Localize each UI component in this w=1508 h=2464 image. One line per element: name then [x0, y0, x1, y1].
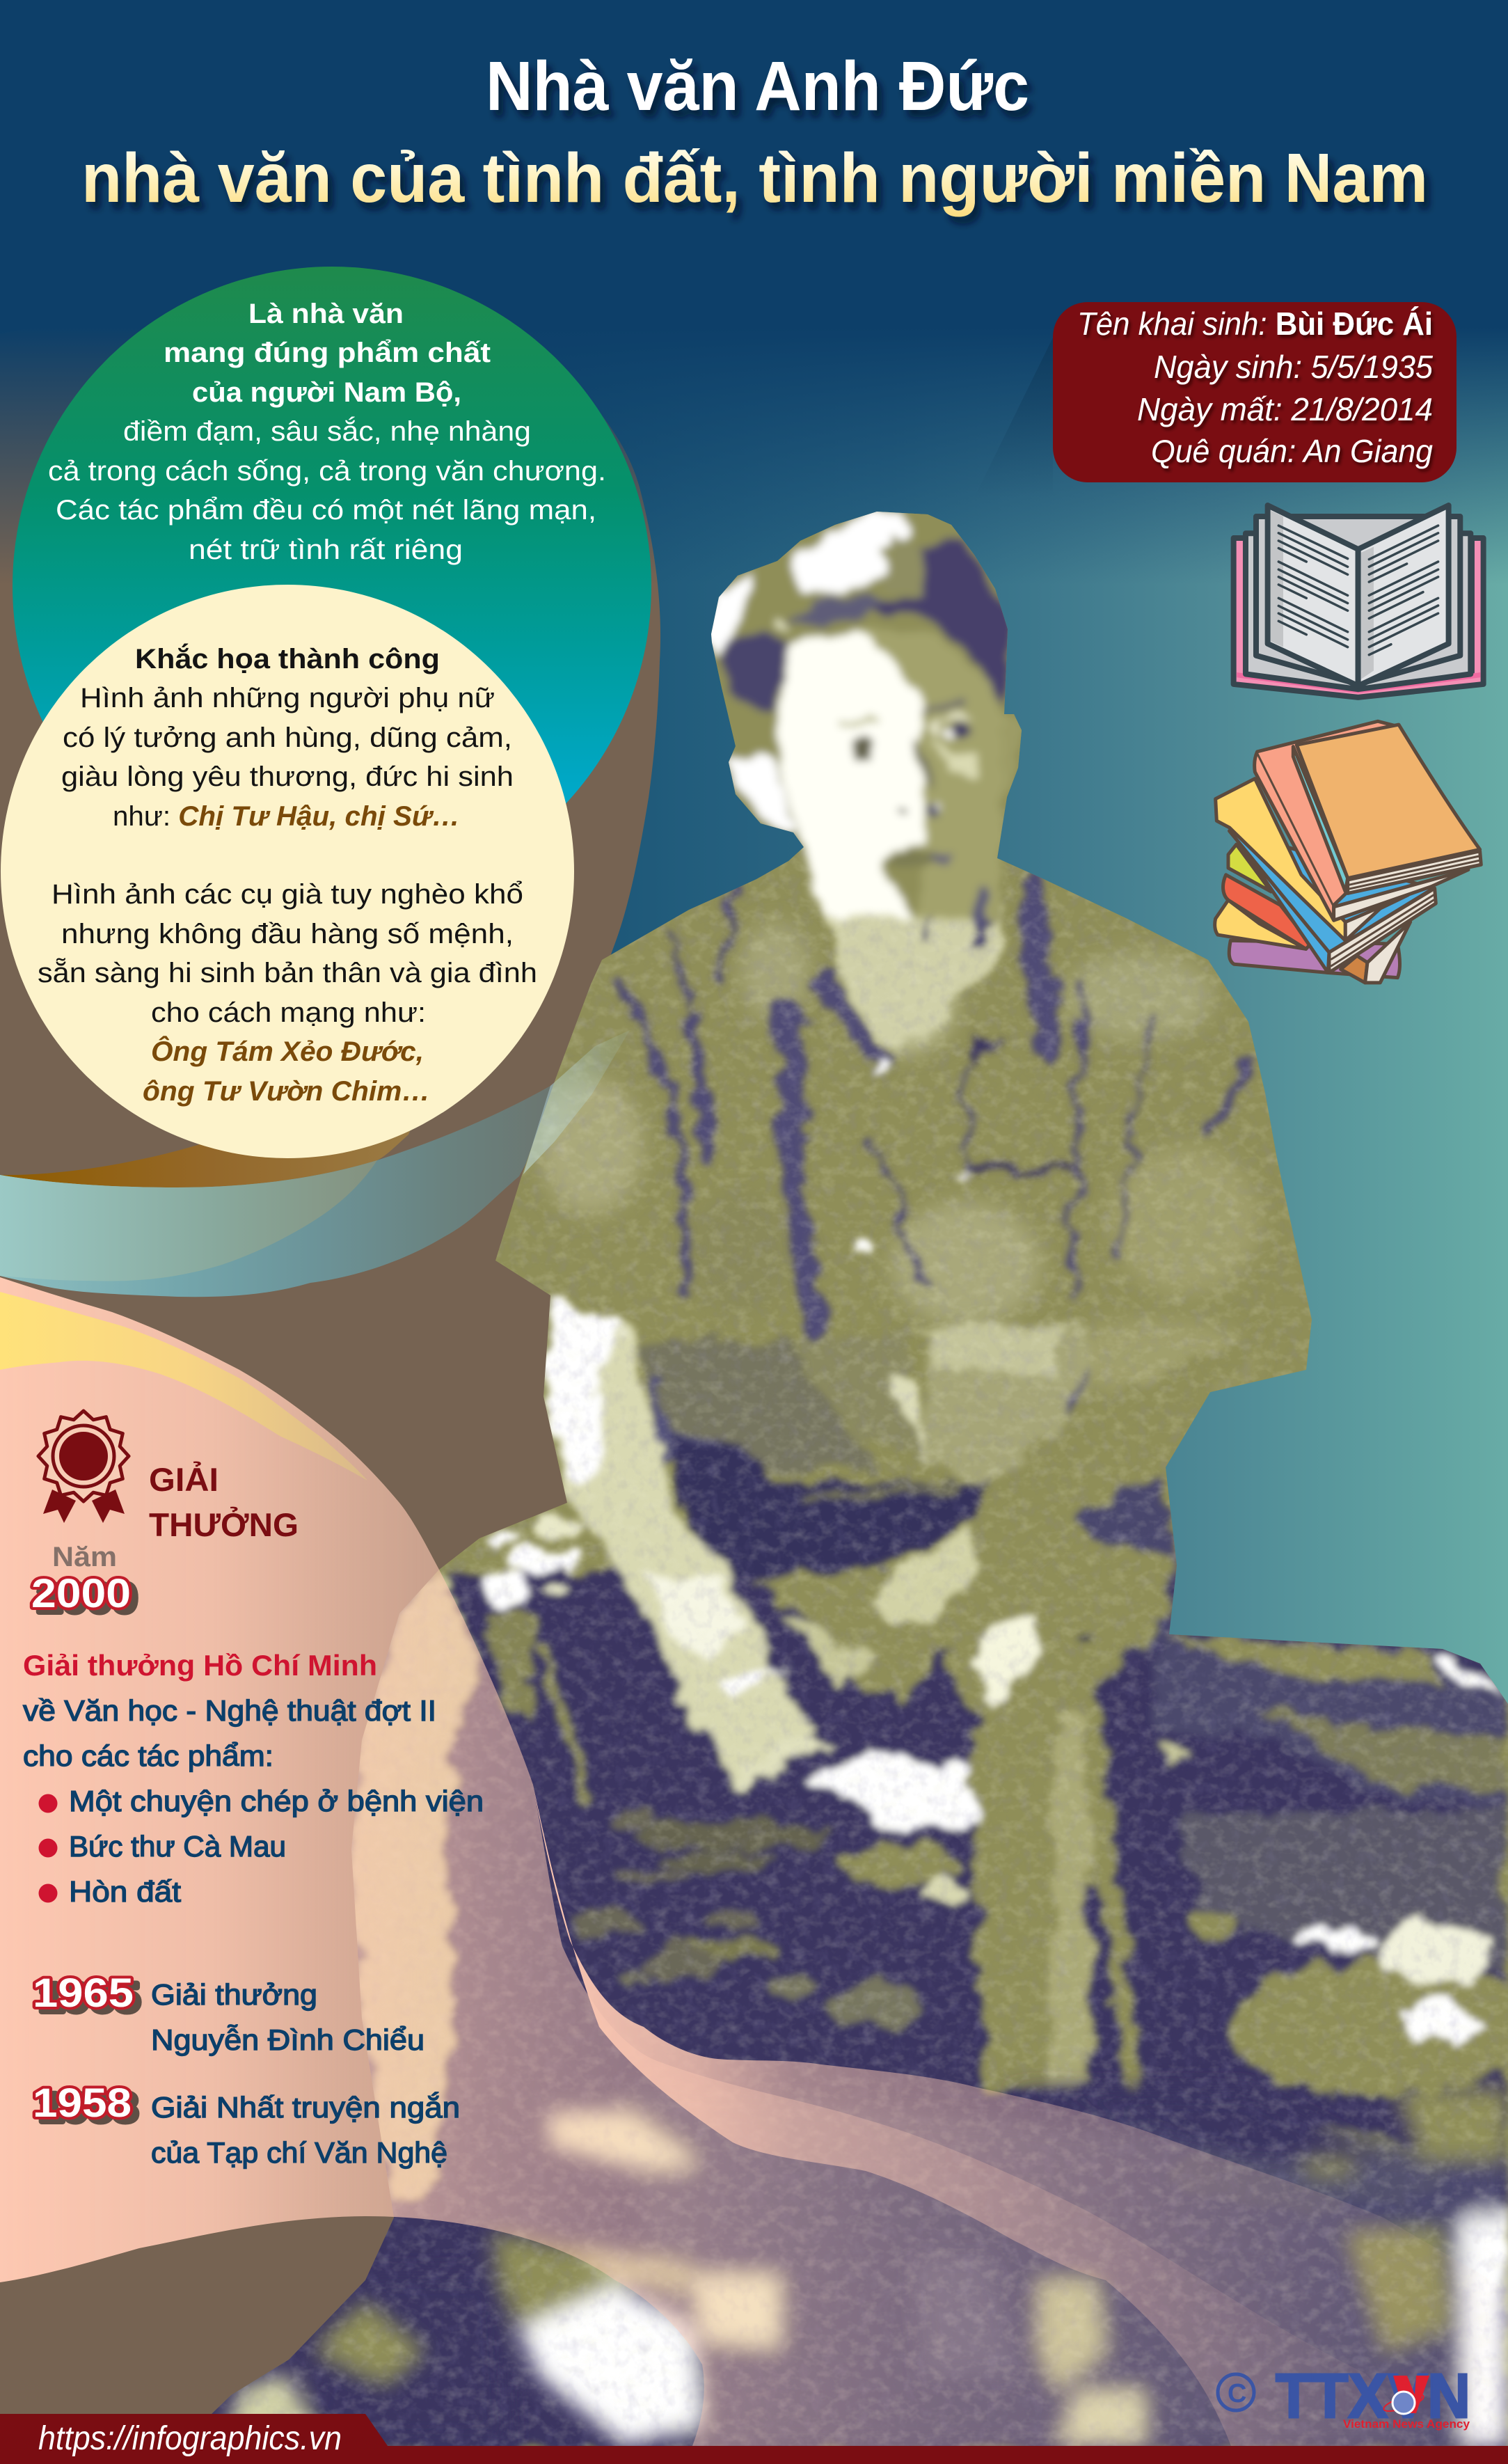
title: nhà văn của tình đất, tình người miền Nam	[81, 139, 1428, 217]
brown backdrop shape	[0, 264, 696, 2446]
year 1965 badge: 1965	[33, 1971, 134, 2016]
cream panel text: Ông Tám Xẻo Đước,	[151, 1035, 424, 1067]
cream panel text: cho cách mạng như:	[151, 997, 426, 1028]
biography text: Tên khai sinh: Bùi Đức Ái	[1077, 306, 1433, 342]
footer bar with website	[0, 2414, 1508, 2464]
beige upper thigh seen through ribbon	[351, 1570, 480, 2193]
award 1965 text: Nguyễn Đình Chiểu	[151, 2023, 424, 2056]
award 2000 text: Giải thưởng Hồ Chí Minh	[23, 1649, 377, 1682]
cream panel text: nhưng không đầu hàng số mệnh,	[61, 919, 514, 949]
green panel text: mang đúng phẩm chất	[164, 338, 491, 368]
logo: TTXVN copyright: Vietnam News Agency	[1343, 2417, 1470, 2431]
biography text	[1077, 306, 1433, 469]
green panel text	[48, 299, 606, 565]
head and face	[696, 496, 1035, 919]
award 2000 text: Hòn đất	[69, 1875, 181, 1908]
icon: open book	[1234, 505, 1484, 697]
cream panel text: ông Tư Vườn Chim…	[143, 1076, 430, 1107]
green panel text: điềm đạm, sâu sắc, nhẹ nhàng	[123, 416, 531, 447]
title	[81, 47, 1428, 217]
award 1965 text	[151, 1978, 424, 2056]
award 2000 text: về Văn học - Nghệ thuật đợt II	[23, 1694, 436, 1727]
icon: award medal	[38, 1411, 129, 1523]
green panel text: của người Nam Bộ,	[192, 377, 461, 408]
portrait photo of the writer	[195, 496, 1508, 2450]
award 2000 text: Bức thư Cà Mau	[69, 1830, 286, 1863]
pale sleeve reflection ribbon	[523, 1030, 630, 1174]
peach ribbon layer: awards panel	[0, 1277, 1434, 2446]
cream panel text: sẵn sàng hi sinh bản thân và gia đình	[38, 957, 537, 988]
yellow swoosh	[0, 1292, 367, 1480]
award 1958 text: Giải Nhất truyện ngắn	[151, 2091, 460, 2124]
cream circle panel	[1, 585, 574, 1158]
footer bar with website: https://infographics.vn	[38, 2420, 342, 2457]
awards heading: THƯỞNG	[149, 1506, 299, 1543]
cream panel text: giàu lòng yêu thương, đức hi sinh	[61, 761, 514, 792]
cream panel text: Hình ảnh những người phụ nữ	[80, 683, 495, 713]
awards heading: GIẢI	[149, 1461, 219, 1498]
award 2000 text: cho các tác phẩm:	[23, 1739, 273, 1772]
biography text: Ngày mất: 21/8/2014	[1137, 391, 1433, 427]
cream panel text: như: Chị Tư Hậu, chị Sứ…	[113, 801, 460, 832]
logo: TTXVN copyright: TTXVN	[1276, 2362, 1470, 2431]
cream panel text: Hình ảnh các cụ già tuy nghèo khổ	[51, 879, 523, 910]
green panel text: nét trữ tình rất riêng	[189, 535, 463, 565]
green panel text: cả trong cách sống, cả trong văn chương.	[48, 456, 606, 487]
navy top band	[0, 0, 1508, 585]
biography info box	[1053, 302, 1457, 482]
award 1958 text: của Tạp chí Văn Nghệ	[151, 2136, 447, 2169]
awards block	[23, 1411, 484, 2169]
logo: TTXVN copyright: C	[1228, 2379, 1246, 2408]
ribbons behind the circles	[0, 1065, 578, 1297]
year label: Năm	[52, 1542, 117, 1572]
lower body base	[195, 1573, 1508, 2450]
award 1965 text: Giải thưởng	[151, 1978, 317, 2011]
award 2000 text	[23, 1649, 484, 1908]
peach ribbon layer: sweeping band	[533, 1785, 1508, 2446]
awards heading	[149, 1461, 299, 1543]
green circle panel	[13, 267, 651, 906]
biography text: Ngày sinh: 5/5/1935	[1154, 349, 1433, 385]
award 2000 text: Một chuyện chép ở bệnh viện	[69, 1785, 484, 1817]
year 2000 badge: 2000	[31, 1571, 131, 1616]
year 1958 badge: 1958	[33, 2080, 132, 2126]
cream panel text: Khắc họa thành công	[135, 642, 440, 674]
biography text: Quê quán: An Giang	[1151, 433, 1433, 469]
icon: stack of books	[1215, 721, 1481, 983]
shadow of info box	[974, 338, 1053, 498]
cream panel text: có lý tưởng anh hùng, dũng cảm,	[63, 722, 512, 753]
title: Nhà văn Anh Đức	[486, 47, 1029, 125]
green panel text: Là nhà văn	[248, 299, 404, 329]
cream panel text	[38, 642, 537, 1107]
green panel text: Các tác phẩm đều có một nét lãng mạn,	[56, 495, 596, 526]
award 1958 text	[151, 2091, 460, 2169]
